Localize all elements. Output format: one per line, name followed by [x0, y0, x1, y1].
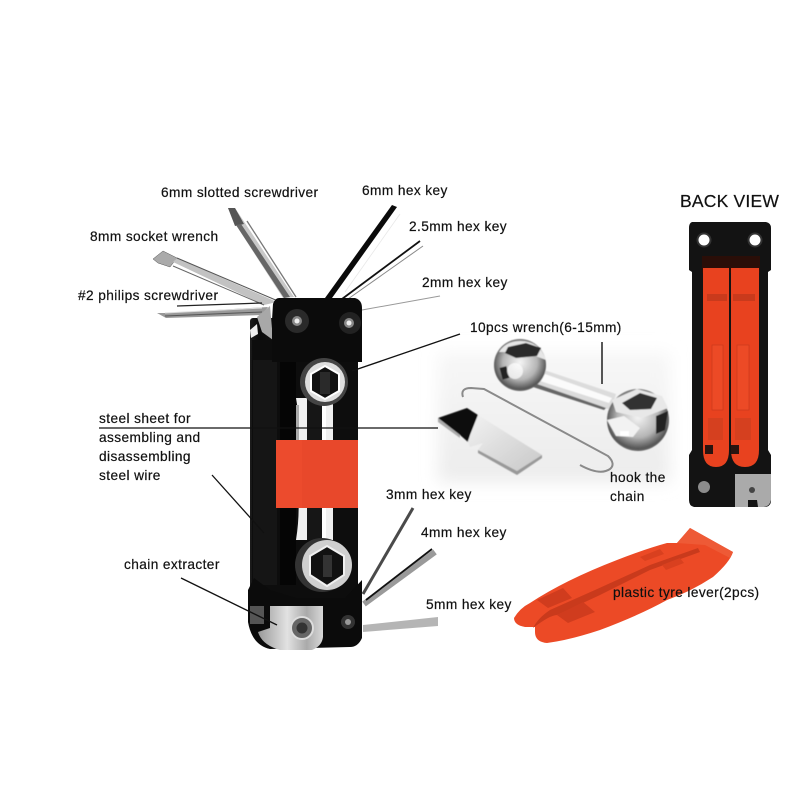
label: chain extracter: chain extracter	[124, 557, 220, 572]
icon: 4mm hex key	[364, 549, 435, 604]
label: philips screwdriver: #2 philips screwdriver	[78, 288, 218, 303]
label: 6mm slotted screwdriver: 6mm slotted screwdriver	[161, 185, 319, 200]
icon: chain extractor block	[735, 474, 771, 507]
tool body	[248, 298, 362, 650]
panel: back view of tool	[689, 222, 771, 507]
line: 10pcs wrench	[352, 334, 460, 371]
icon: chain hook	[462, 388, 613, 472]
panel: wrench and steel sheet photo	[438, 339, 670, 482]
line: wrench bone	[601, 342, 603, 384]
icon: right tyre lever	[731, 268, 759, 467]
bottom head	[248, 578, 362, 649]
icon: mounting holes	[698, 234, 762, 246]
label: hook the chain: chain	[610, 489, 645, 504]
heading: back view: BACK VIEW	[680, 191, 779, 211]
icon: 2mm hex key	[362, 296, 440, 310]
label: 6mm hex key: 6mm hex key	[362, 183, 448, 198]
orange band	[276, 440, 358, 508]
icon: 6mm hex key	[325, 205, 400, 298]
line: chain extracter	[181, 578, 277, 625]
icon: 3mm hex key	[363, 508, 413, 594]
icon: back screw	[698, 481, 710, 493]
photo backdrop	[438, 352, 670, 482]
label: 10pcs wrench: 10pcs wrench(6-15mm)	[470, 320, 622, 335]
label: steel sheet description: steel wire	[99, 468, 161, 483]
icon: steel sheet	[438, 408, 542, 475]
icon: slotted screwdriver	[228, 208, 296, 298]
label: 2mm hex key: 2mm hex key	[422, 275, 508, 290]
label: steel sheet description: disassembling	[99, 449, 191, 464]
icon: socket wrench	[153, 251, 278, 305]
icon: bottom hex socket	[295, 538, 352, 592]
label: hook the chain: hook the	[610, 470, 666, 485]
icon: 5mm hex key	[363, 617, 438, 632]
label: 4mm hex key: 4mm hex key	[421, 525, 507, 540]
icon: plastic tyre levers	[514, 528, 733, 643]
label: plastic tyre lever: plastic tyre lever(2pcs)	[613, 585, 760, 600]
label: steel sheet description: assembling and	[99, 430, 200, 445]
body frame	[689, 222, 771, 507]
icon: 2.5mm hex key	[342, 241, 423, 299]
wrench shaft	[296, 398, 333, 540]
label: 2.5mm hex key: 2.5mm hex key	[409, 219, 507, 234]
icon: philips screwdriver	[157, 303, 268, 318]
silver wedge behind head	[257, 306, 273, 340]
panel: main multi-tool front view	[153, 205, 440, 650]
label: steel sheet description: steel sheet for	[99, 411, 191, 426]
line: steel sheet	[99, 427, 438, 429]
label: 3mm hex key: 3mm hex key	[386, 487, 472, 502]
icon: 10pcs bone wrench	[494, 339, 669, 451]
line: assembly to body	[212, 475, 264, 533]
label: 8mm socket wrench: 8mm socket wrench	[90, 229, 219, 244]
top head	[272, 298, 362, 362]
leader lines	[99, 334, 602, 625]
icon: top hex socket	[300, 358, 348, 406]
icon: left tyre lever	[703, 268, 729, 467]
label: 5mm hex key: 5mm hex key	[426, 597, 512, 612]
